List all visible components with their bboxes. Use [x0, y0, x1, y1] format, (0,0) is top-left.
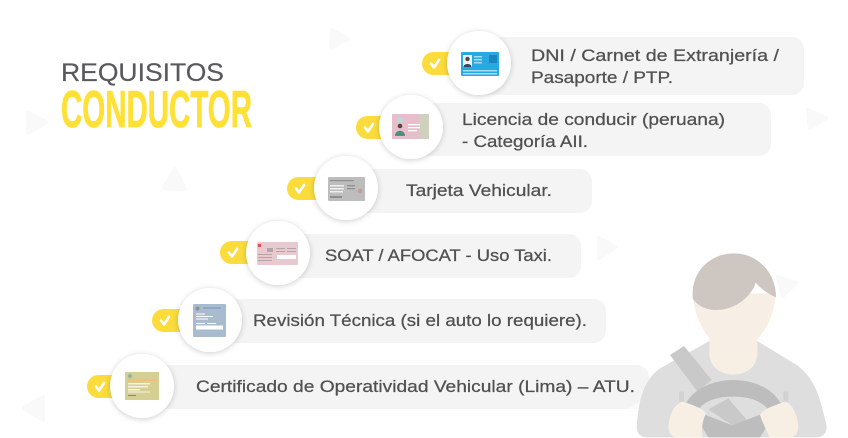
hair [693, 253, 776, 310]
row: tarjeta vehicular [287, 156, 592, 220]
icon: DNI card [461, 52, 499, 76]
row: licencia: Licencia de conducir (peruana) [462, 110, 725, 129]
heading: conductor: CONDUCTOR [61, 81, 252, 139]
neck [709, 337, 757, 375]
icon: certificado document [125, 372, 159, 400]
steering wheel spokes [702, 414, 767, 437]
icon: tarjeta card [328, 177, 365, 201]
row: DNI: DNI / Carnet de Extranjería / [531, 46, 779, 65]
row: revision tecnica: Revisión Técnica (si el auto lo requiere). [253, 311, 587, 330]
right hand [760, 402, 798, 437]
row: tarjeta vehicular: Tarjeta Vehicular. [406, 181, 552, 200]
row: SOAT: SOAT / AFOCAT - Uso Taxi. [325, 246, 552, 265]
left hand [668, 402, 706, 437]
row: revision tecnica [152, 288, 606, 352]
illustration: driver [637, 253, 827, 437]
row: DNI [422, 31, 804, 95]
title [61, 59, 252, 139]
row: licencia: - Categoría AII. [462, 132, 588, 151]
row: licencia [356, 95, 771, 159]
driver body [637, 341, 827, 437]
belt behind wheel [708, 398, 748, 425]
icon: SOAT card [257, 242, 298, 265]
steering wheel ring [685, 380, 782, 412]
face [693, 293, 776, 353]
heading: requisitos: REQUISITOS [61, 59, 224, 87]
row: certificado [87, 354, 649, 418]
seat belt [670, 346, 712, 392]
row: SOAT [220, 221, 581, 285]
icon: revision document [193, 304, 226, 337]
row: certificado: Certificado de Operatividad Vehicular (Lima) – ATU. [196, 377, 635, 396]
row: DNI: Pasaporte / PTP. [531, 68, 673, 87]
icon: licencia card [392, 114, 429, 139]
